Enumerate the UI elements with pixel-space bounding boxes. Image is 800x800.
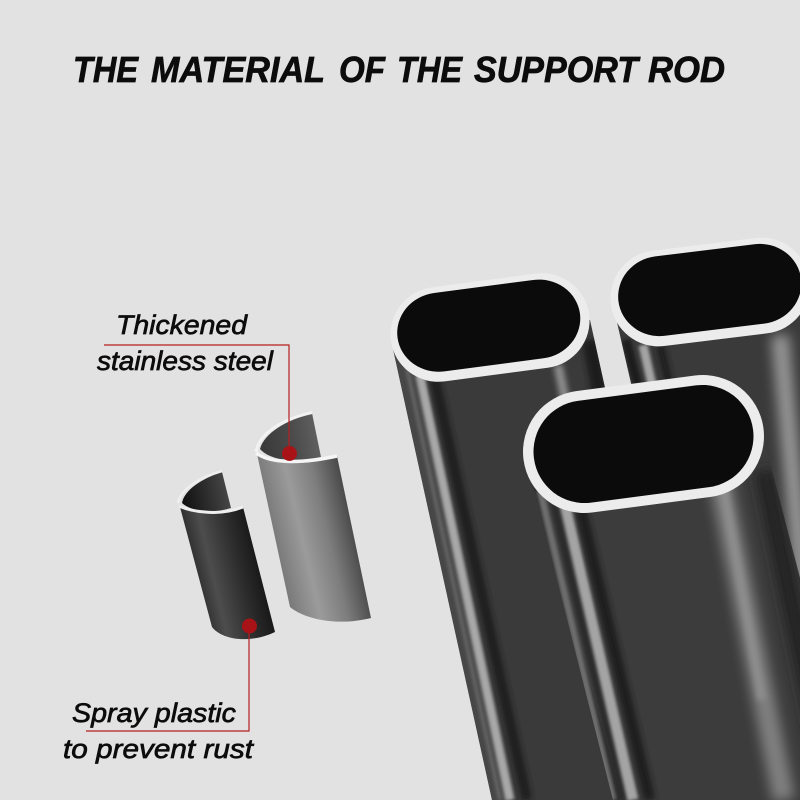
title: THE [73,49,139,90]
tube: rear left [390,274,613,800]
rim: rear right tube [605,232,800,352]
title: THE [397,49,463,90]
title: OF [339,49,386,90]
title: ROD [648,49,725,90]
cut sample: spray plastic coated [178,471,275,639]
leader line: spray plastic [86,626,249,731]
tube: rear right [610,238,800,578]
title: MATERIAL [151,49,325,90]
marker dot: spray plastic [242,618,257,634]
opening: rear left tube [392,274,585,377]
title [73,49,725,90]
title: SUPPORT [474,49,641,90]
marker dot: stainless steel [282,446,297,461]
label: Thickened: Thickened [116,310,248,340]
label: to prevent rust: to prevent rust [63,734,255,764]
cut sample: bare stainless steel [256,412,371,622]
opening: rear right tube [614,239,800,341]
callout: thickened stainless steel [97,310,297,461]
leader line: stainless steel [104,345,289,453]
callout: spray plastic to prevent rust [63,618,257,764]
rim: rear left tube [385,267,595,388]
tube: front [516,368,800,800]
label: stainless steel: stainless steel [97,346,274,376]
label: Spray plastic: Spray plastic [72,698,237,728]
opening: front tube [527,379,760,509]
rim: front tube [516,368,771,520]
